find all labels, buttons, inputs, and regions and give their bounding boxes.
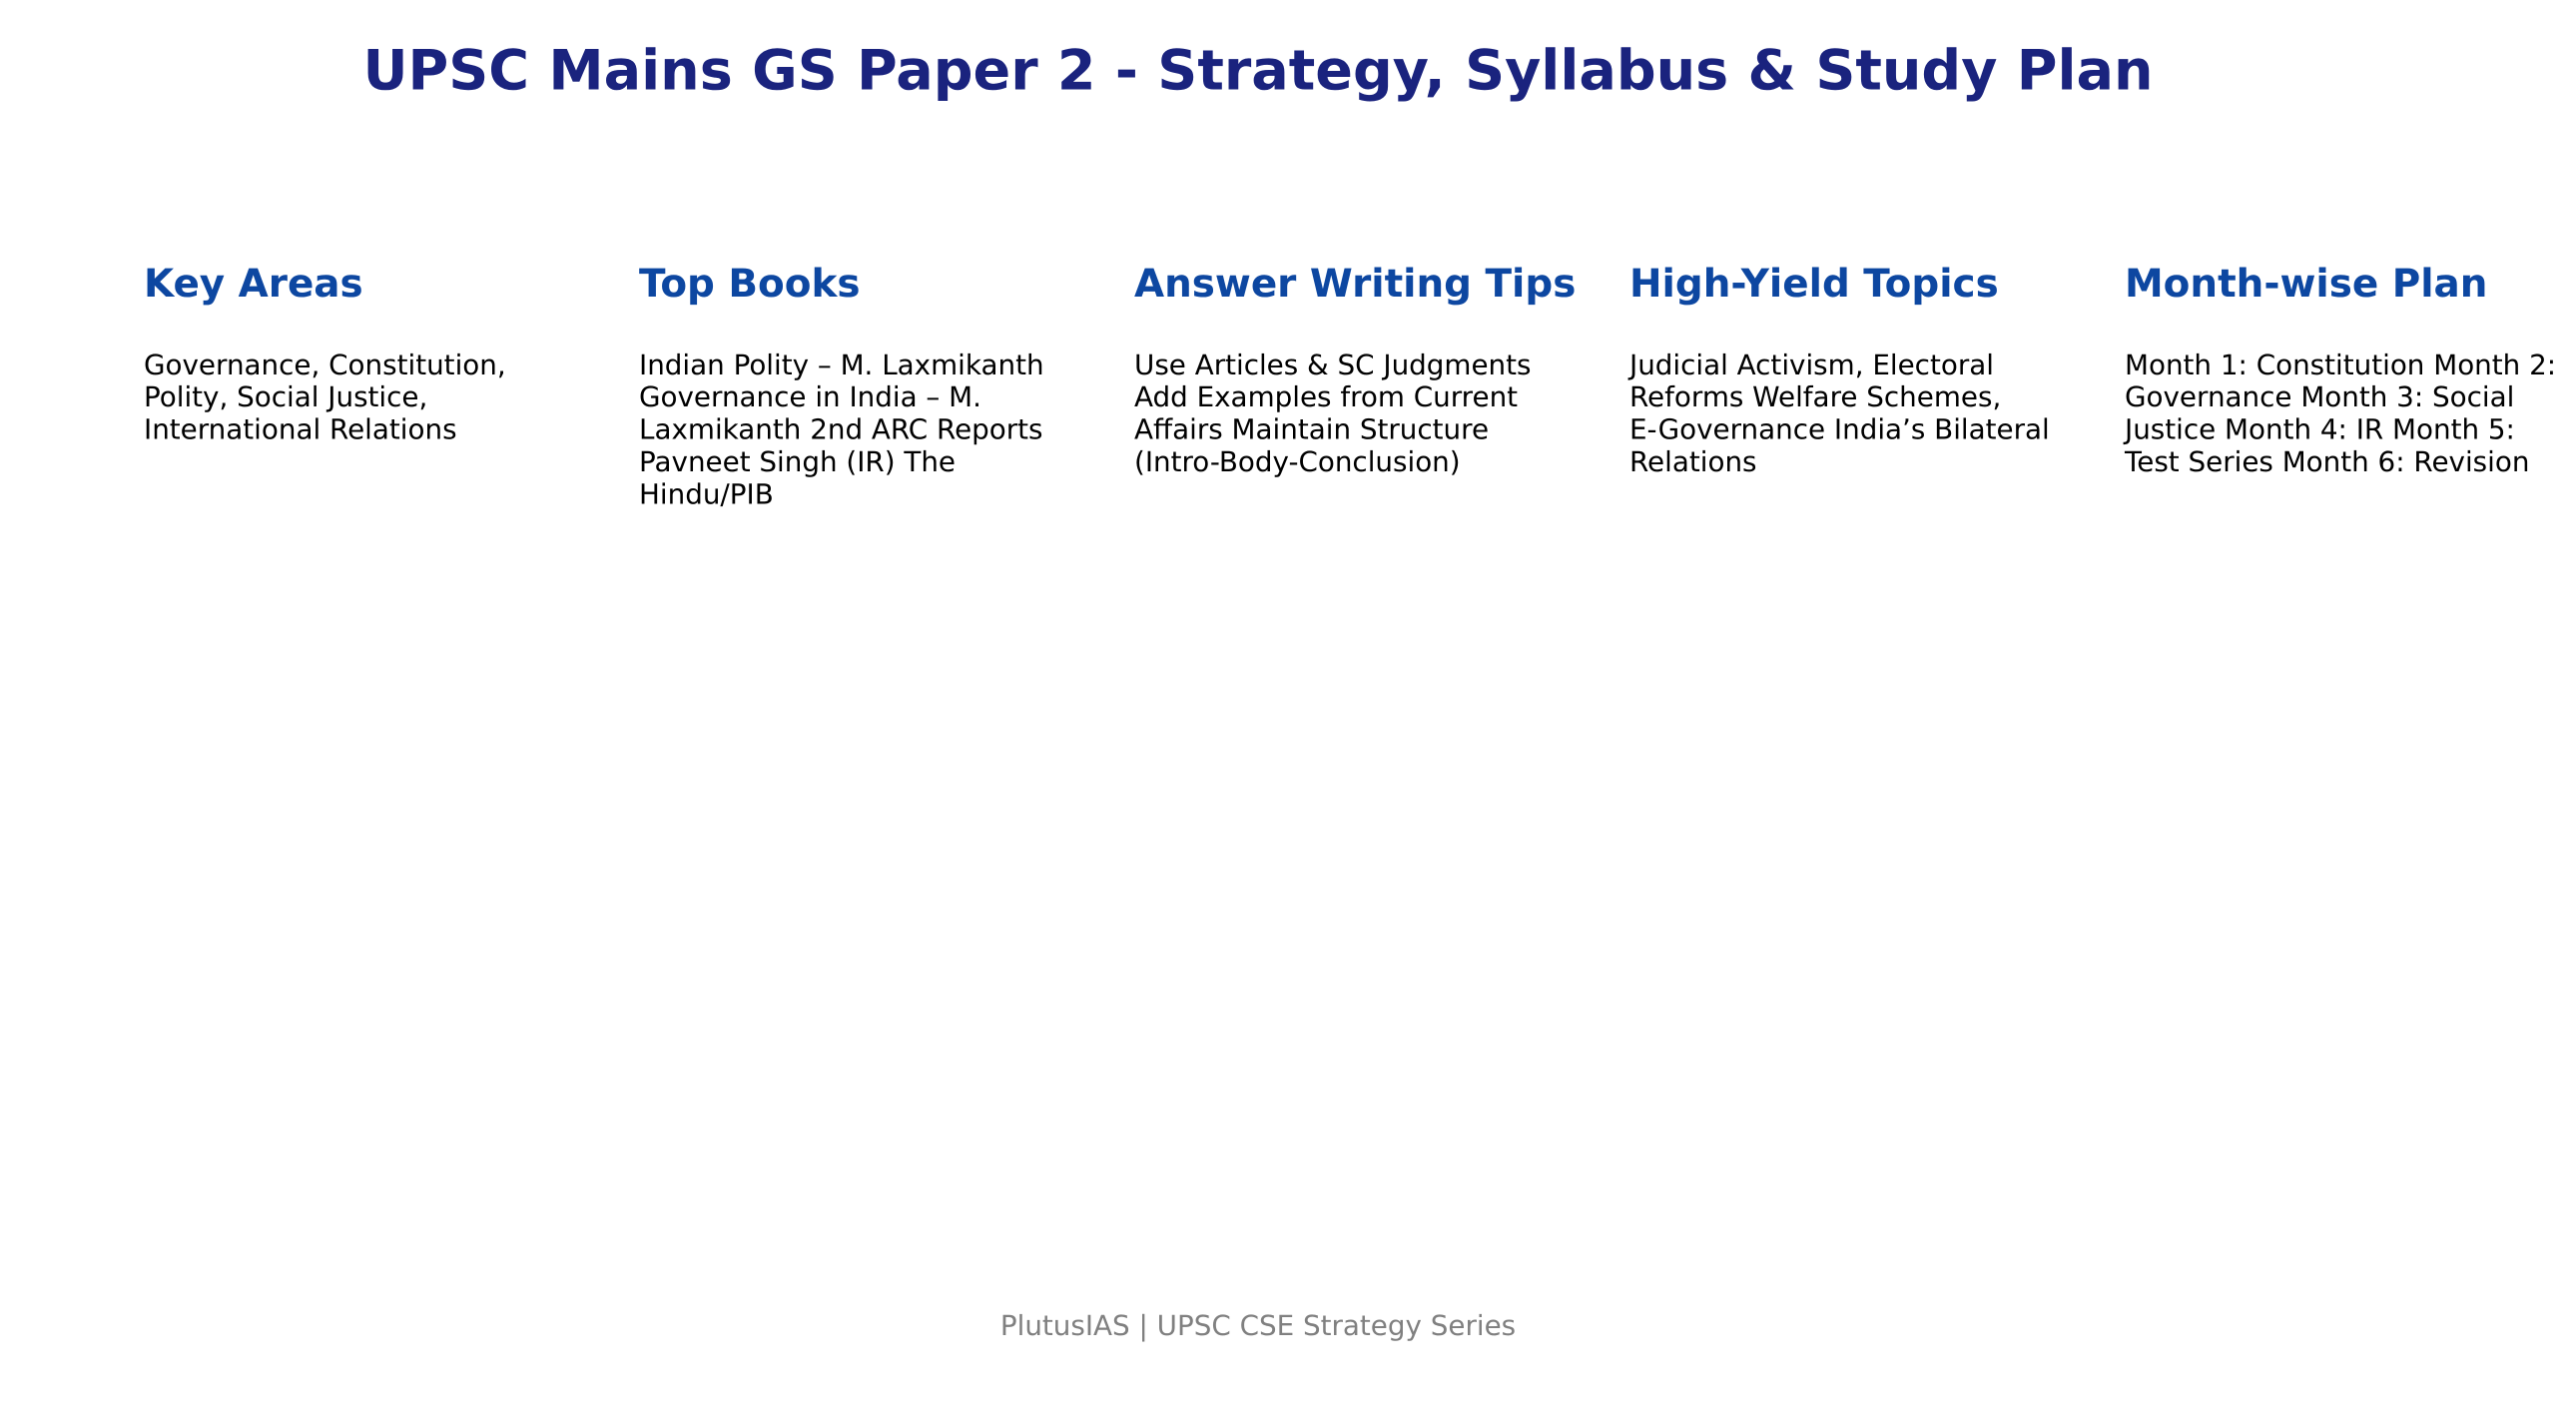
text block: month-wise plan: Month 1: Constitution Month 2: — [2125, 349, 2556, 381]
heading: key areas: Key Areas — [144, 262, 363, 307]
text block: high-yield topics: Reforms Welfare Schemes, — [1629, 380, 2001, 413]
text block: answer writing tips: Add Examples from Current — [1134, 380, 1518, 413]
title: UPSC Mains GS Paper 2 - Strategy, Syllabus & Study Plan — [362, 39, 2154, 104]
text block: top books: Hindu/PIB — [639, 477, 774, 511]
text block: month-wise plan: Governance Month 3: Social — [2125, 380, 2514, 413]
panel: key areas — [144, 262, 506, 445]
heading: answer writing tips: Answer Writing Tips — [1134, 262, 1576, 307]
heading: high-yield topics: High-Yield Topics — [1629, 262, 1999, 307]
panel: high-yield topics — [1627, 262, 2050, 478]
text block: high-yield topics: Relations — [1629, 445, 1757, 478]
panel: top books — [639, 262, 1044, 511]
heading: top books: Top Books — [639, 262, 860, 307]
text block: top books: Indian Polity – M. Laxmikanth — [639, 349, 1044, 381]
text block: high-yield topics: E-Governance India’s Bilateral — [1629, 413, 2050, 445]
text block: answer writing tips: (Intro-Body-Conclusion) — [1134, 445, 1461, 478]
panel: answer writing tips — [1134, 262, 1576, 478]
text block: top books: Pavneet Singh (IR) The — [639, 445, 956, 478]
footer: PlutusIAS | UPSC CSE Strategy Series — [1000, 1309, 1516, 1342]
text block: key areas: Polity, Social Justice, — [144, 380, 427, 413]
panel: month-wise plan — [2123, 262, 2556, 478]
text block: high-yield topics: Judicial Activism, Electoral — [1627, 349, 1994, 381]
text block: answer writing tips: Affairs Maintain Structure — [1134, 413, 1489, 445]
text block: key areas: Governance, Constitution, — [144, 349, 506, 381]
text block: answer writing tips: Use Articles & SC Judgments — [1134, 349, 1532, 381]
text block: month-wise plan: Justice Month 4: IR Month 5: — [2123, 413, 2515, 445]
text block: key areas: International Relations — [144, 413, 457, 445]
text block: month-wise plan: Test Series Month 6: Revision — [2124, 445, 2529, 478]
text block: top books: Laxmikanth 2nd ARC Reports — [639, 413, 1043, 445]
text block: top books: Governance in India – M. — [639, 380, 981, 413]
heading: month-wise plan: Month-wise Plan — [2125, 262, 2487, 307]
